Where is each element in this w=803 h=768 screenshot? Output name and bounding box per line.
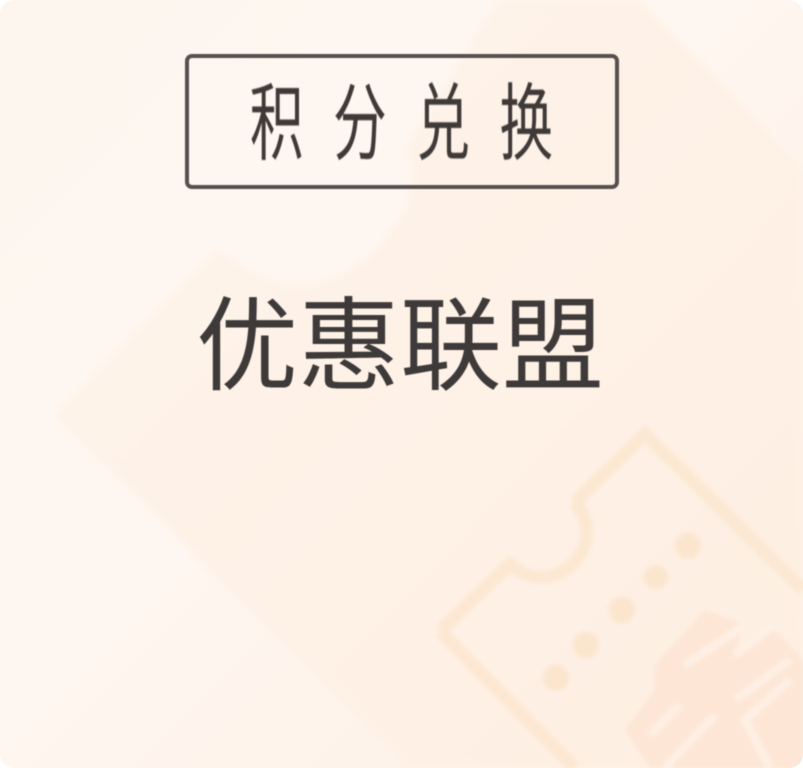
ticket perforation dots xyxy=(543,533,701,691)
tag box: outlined label frame xyxy=(185,54,619,189)
tag text: 积分兑换 xyxy=(250,77,583,171)
ticket symbol xyxy=(625,610,803,768)
icon: discount ticket xyxy=(440,434,803,768)
ticket outline xyxy=(440,434,803,768)
title: 优惠联盟 xyxy=(196,290,604,404)
